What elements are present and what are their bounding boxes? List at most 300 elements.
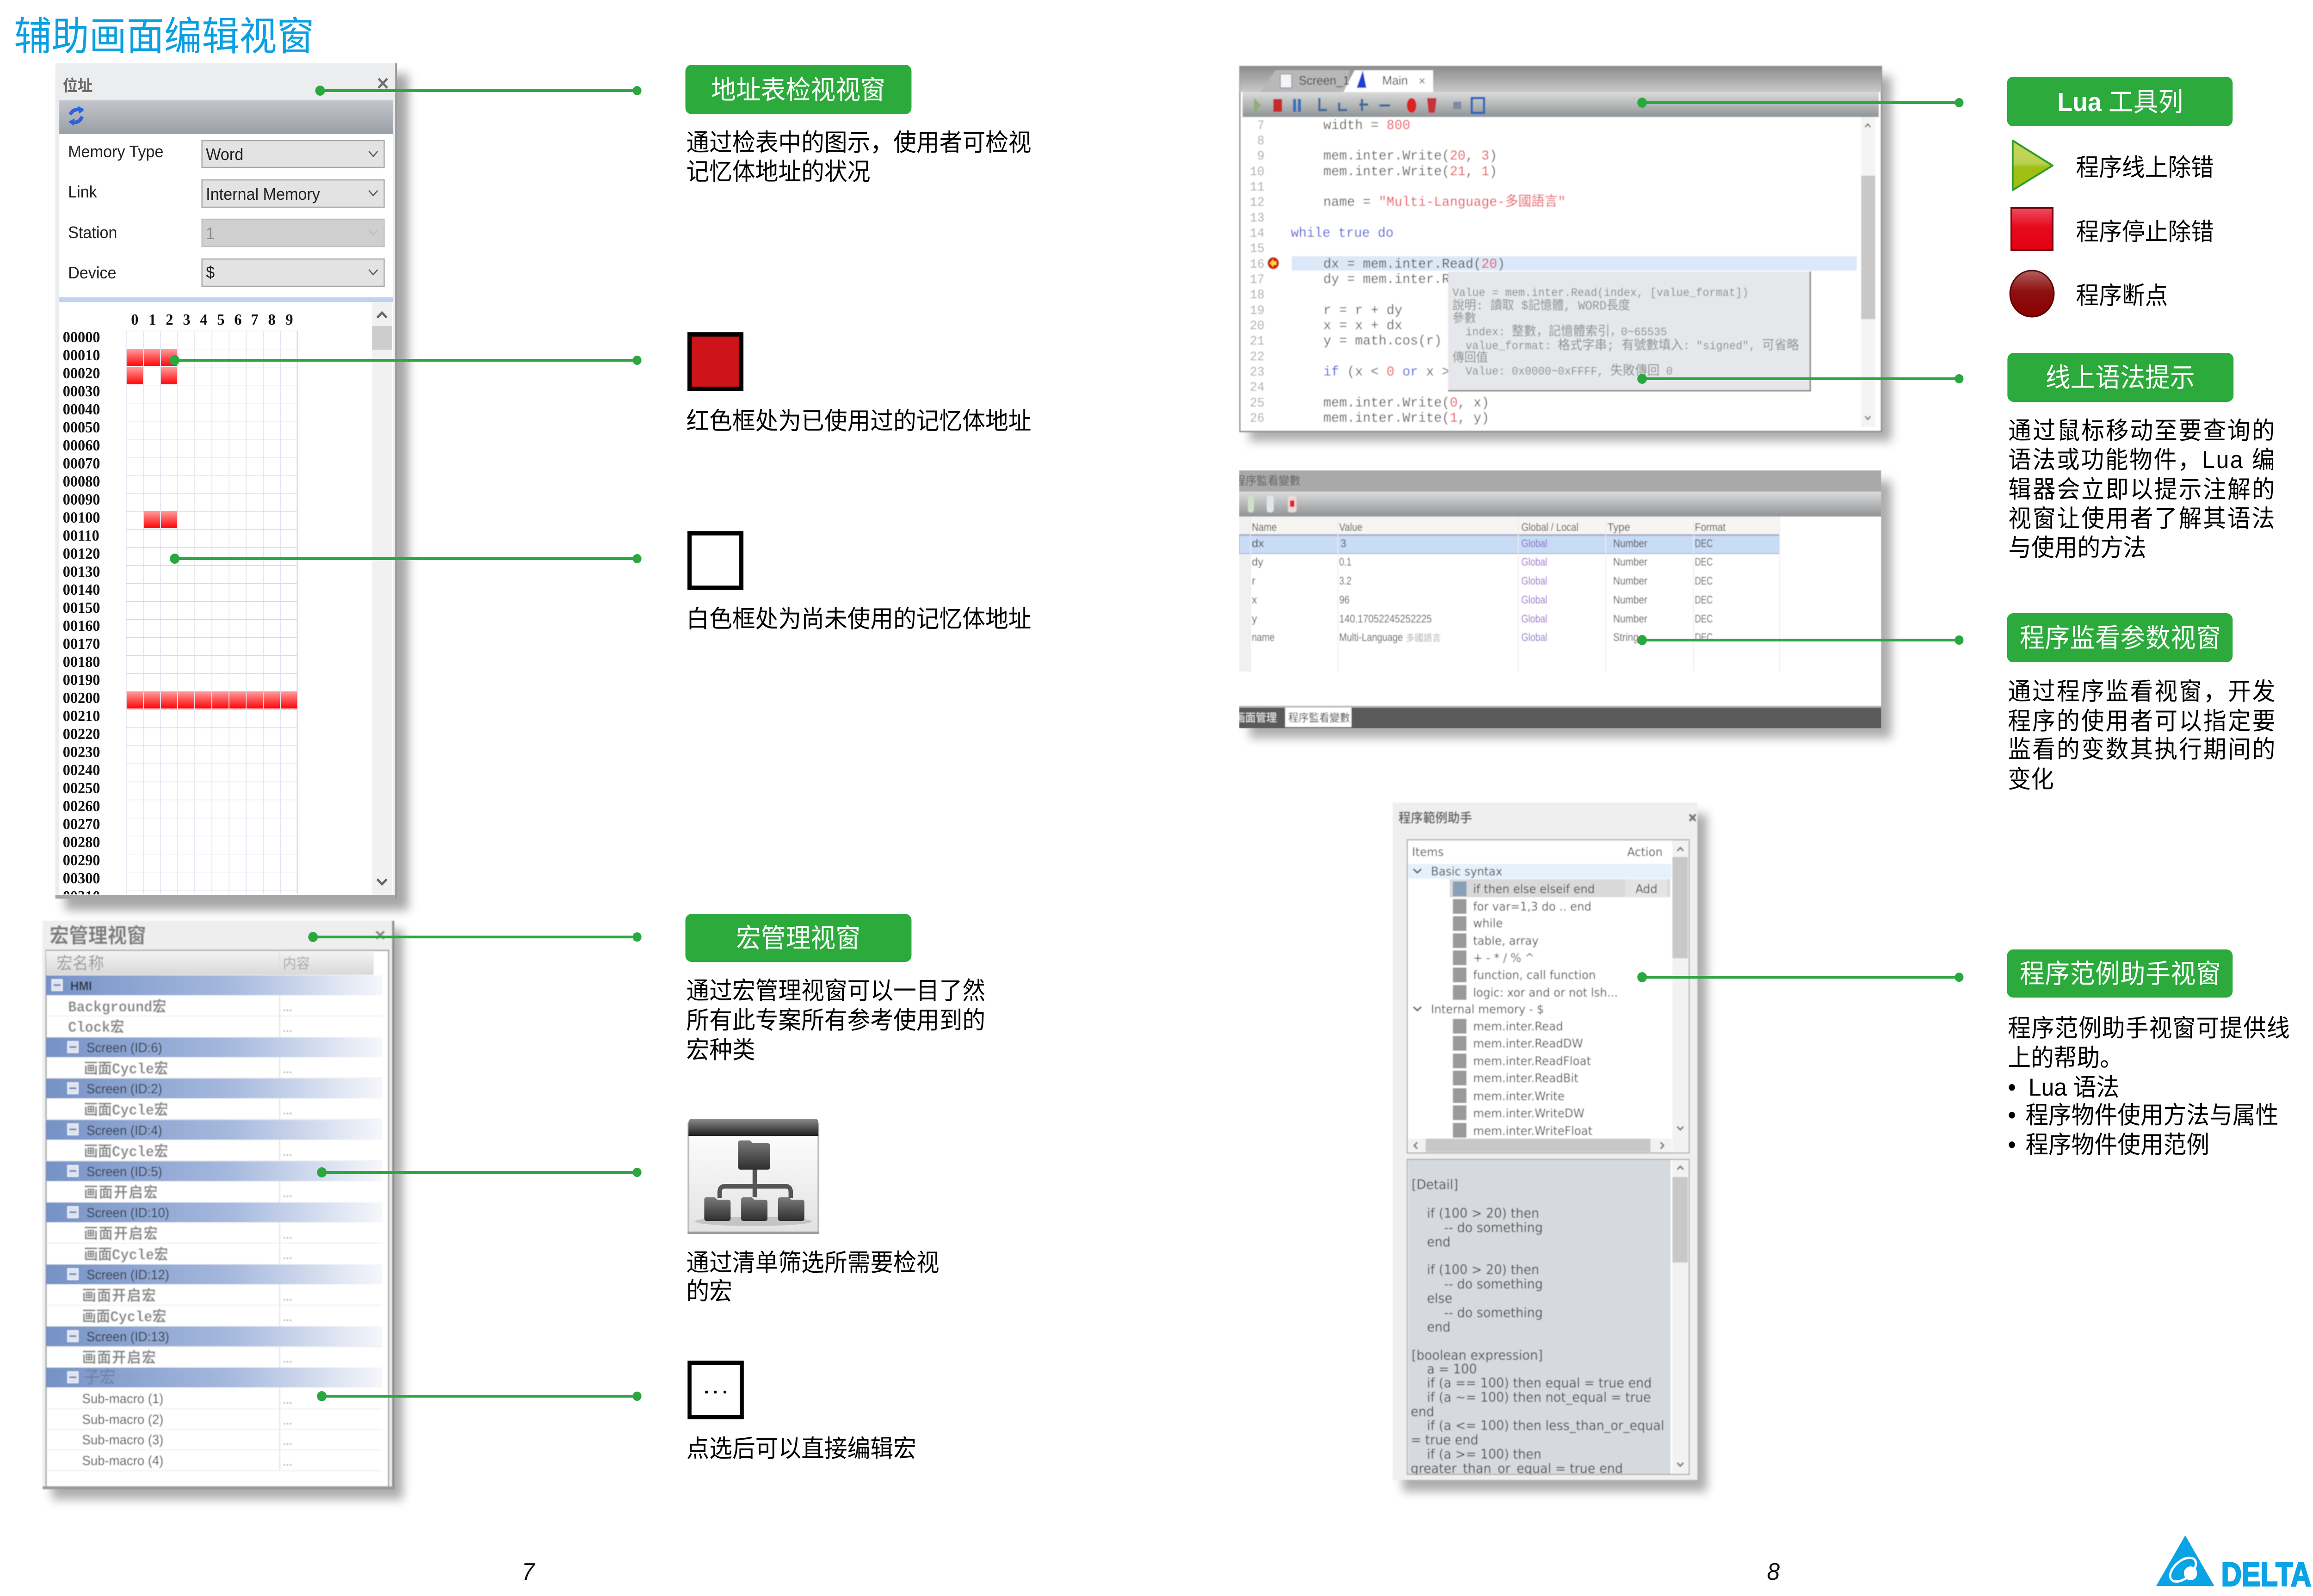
row addresses: 00090	[63, 491, 100, 508]
row addresses: 00030	[63, 382, 100, 400]
row addresses: 00050	[63, 419, 100, 436]
detail code text: end	[1427, 1319, 1451, 1335]
sub-macro labels: Sub-macro (2)	[82, 1411, 163, 1427]
row addresses: 00240	[63, 761, 100, 779]
column digits: 9	[285, 311, 293, 328]
edit dots: ...	[283, 1310, 292, 1324]
row addresses	[63, 328, 100, 905]
code text: mem.inter.Write(21, 1)	[1323, 164, 1497, 179]
field labels: Station	[68, 223, 117, 242]
dropdown: link	[202, 180, 384, 207]
macro labels: 画面Cycle宏	[82, 1308, 167, 1326]
column digits: 7	[251, 311, 259, 328]
icon: white box	[690, 533, 742, 588]
scrollbar	[1861, 117, 1875, 427]
dropdown: device	[202, 259, 384, 286]
header row: Format	[1695, 521, 1726, 533]
row addresses: 00000	[63, 328, 100, 346]
macro labels: 画面开启宏	[82, 1288, 157, 1305]
group labels: Screen (ID:4)	[87, 1122, 162, 1138]
heading: Lua toolbar: Lua 工具列	[2057, 87, 2183, 117]
table header: 宏名称	[56, 954, 104, 973]
group labels: Screen (ID:6)	[87, 1040, 162, 1055]
list scrollbars	[1408, 841, 1688, 1152]
column digits: 4	[200, 311, 207, 328]
callout line: syntax tip	[1637, 374, 1963, 384]
selected row	[1239, 536, 1780, 554]
row addresses: 00040	[63, 401, 100, 418]
heading: Lua toolbar	[2007, 77, 2233, 126]
panel: macro manager window	[43, 921, 403, 1499]
item text: mem.inter.ReadFloat	[1473, 1054, 1591, 1068]
text: example helper description: •	[2008, 1074, 2016, 1101]
breakpoint marker	[1268, 257, 1279, 269]
header row	[1239, 517, 1780, 536]
detail code text: if (a ~= 100) then not_equal = true	[1427, 1389, 1651, 1405]
callout line: address window	[315, 86, 642, 96]
row addresses: 00180	[63, 653, 100, 671]
title bar	[1235, 470, 1881, 492]
row addresses: 00310	[63, 887, 100, 905]
macro labels: 画面Cycle宏	[84, 1060, 168, 1078]
line numbers	[1250, 118, 1264, 426]
text: macro manager description: 宏种类	[686, 1036, 755, 1063]
table data: DEC	[1695, 574, 1713, 587]
row addresses: 00160	[63, 617, 100, 635]
row addresses: 00290	[63, 851, 100, 869]
page number 8: 8	[1767, 1558, 1780, 1585]
text: syntax tip description: 通过鼠标移动至要查询的	[2008, 417, 2275, 444]
page number 7: 7	[522, 1558, 535, 1585]
group labels: 子宏	[84, 1368, 116, 1386]
row addresses: 00220	[63, 725, 100, 743]
text: watch description: 通过程序监看视窗，开发	[2008, 678, 2275, 705]
close button	[378, 79, 387, 88]
group labels: Screen (ID:10)	[87, 1205, 169, 1220]
detail code text: a = 100	[1427, 1361, 1477, 1377]
tab bar: Main	[1382, 73, 1408, 87]
line numbers: 13	[1250, 211, 1264, 226]
line numbers: 25	[1250, 396, 1264, 411]
bottom tabs	[1235, 706, 1881, 728]
table data: Global	[1521, 612, 1547, 625]
panel: program example helper window	[1393, 802, 1707, 1491]
edit dots: ...	[283, 1414, 292, 1427]
detail code text: -- do something	[1444, 1305, 1543, 1320]
row addresses: 00260	[63, 797, 100, 815]
item text: Internal memory - $	[1431, 1002, 1544, 1016]
callout line: macro filter	[317, 1167, 642, 1177]
macro labels: 画面Cycle宏	[84, 1143, 168, 1161]
sub-macro labels: Sub-macro (3)	[82, 1432, 163, 1447]
table data: DEC	[1695, 593, 1713, 606]
toolbar	[1239, 492, 1881, 517]
edit dots: ...	[283, 1352, 292, 1365]
code text	[1291, 117, 1565, 426]
field labels: Device	[68, 264, 117, 282]
table data: Global	[1521, 555, 1547, 568]
row separators	[46, 1016, 382, 1471]
item list	[1407, 840, 1689, 1153]
text: syntax tip description: 与使用的方法	[2008, 534, 2146, 561]
icon: folder tree	[687, 1119, 819, 1234]
syntax tooltip: index: 整數，記憶體索引，0~65535	[1466, 324, 1667, 339]
header row: Global / Local	[1521, 521, 1578, 533]
heading: macro manager window	[686, 914, 911, 962]
table data: DEC	[1695, 555, 1713, 568]
sub-macro labels: Sub-macro (1)	[82, 1391, 163, 1406]
group labels	[70, 979, 169, 1386]
bottom tabs: 程序監看變數	[1288, 711, 1350, 724]
column digits: 1	[148, 311, 156, 328]
item text: mem.inter.ReadDW	[1473, 1036, 1583, 1050]
memory grid	[63, 311, 298, 905]
icon: breakpoint circle	[2010, 271, 2054, 317]
text: filter description	[686, 1249, 939, 1305]
row addresses: 00210	[63, 707, 100, 725]
macro labels: 画面开启宏	[84, 1226, 159, 1243]
table data: Global	[1521, 593, 1547, 606]
syntax tooltip: Value: 0x0000~0xFFFF, 失敗傳回 0	[1466, 363, 1673, 379]
item text: logic: xor and or not lsh...	[1473, 986, 1618, 999]
field labels	[68, 142, 163, 282]
toolbar	[59, 100, 393, 134]
icon: refresh	[68, 106, 84, 126]
syntax tooltip	[1448, 271, 1810, 391]
detail code text: end	[1411, 1404, 1434, 1419]
header row: Name	[1252, 521, 1277, 533]
text: syntax tip description: 语法或功能物件，Lua 编	[2008, 446, 2275, 473]
text: syntax tip description	[2008, 417, 2275, 561]
macro labels: 画面Cycle宏	[84, 1246, 168, 1264]
line numbers: 10	[1250, 165, 1264, 179]
item text: if then else elseif end	[1473, 882, 1595, 896]
dropdown: memory type: Word	[206, 145, 243, 164]
edit dots: ...	[283, 1021, 292, 1035]
line numbers: 9	[1257, 149, 1264, 164]
line numbers: 11	[1250, 180, 1264, 195]
dropdown: station: 1	[206, 224, 215, 243]
table header	[46, 951, 374, 1471]
text: example helper description: •	[2008, 1131, 2016, 1158]
scrollbar	[372, 302, 392, 895]
table data: r	[1252, 574, 1255, 587]
group labels: Screen (ID:12)	[87, 1267, 169, 1282]
macro labels: 画面Cycle宏	[84, 1102, 168, 1119]
text: macro manager description: 通过宏管理视窗可以一目了然	[686, 977, 985, 1004]
row addresses: 00070	[63, 455, 100, 472]
text: example helper description: •	[2008, 1102, 2016, 1128]
line numbers: 18	[1250, 288, 1264, 302]
column digits: 8	[268, 311, 276, 328]
detail code text: greater_than_or_equal = true end	[1411, 1460, 1623, 1476]
detail code text: if (100 > 20) then	[1427, 1205, 1539, 1221]
panel: address table window	[56, 63, 408, 910]
code text: mem.inter.Write(1, y)	[1323, 410, 1489, 426]
row addresses: 00270	[63, 815, 100, 833]
column digits: 5	[217, 311, 224, 328]
macro labels: 画面开启宏	[82, 1350, 157, 1367]
text: example helper description: Lua 语法	[2029, 1074, 2119, 1101]
sub-macro labels	[82, 1391, 163, 1468]
header row: Value	[1339, 521, 1362, 533]
detail code text: [boolean expression]	[1411, 1347, 1543, 1363]
text: breakpoint: 程序断点	[2076, 282, 2168, 309]
line numbers: 24	[1250, 380, 1264, 395]
code text: mem.inter.Write(0, x)	[1323, 395, 1489, 411]
table data: DEC	[1695, 537, 1713, 549]
window title: 位址	[63, 77, 93, 95]
row addresses: 00010	[63, 346, 100, 364]
heading: watch window: 程序监看参数视窗	[2020, 623, 2221, 653]
text: stop debug: 程序停止除错	[2076, 218, 2214, 245]
edit dots	[283, 1000, 292, 1468]
code text: while true do	[1291, 225, 1393, 241]
item text: Basic syntax	[1431, 864, 1503, 878]
callout line: macro edit	[317, 1391, 642, 1401]
text: edit macro description: 点选后可以直接编辑宏	[686, 1435, 916, 1462]
row addresses: 00230	[63, 743, 100, 761]
table data: 3.2	[1339, 574, 1351, 587]
detail code text: -- do something	[1444, 1276, 1543, 1292]
bottom tabs: 画面管理	[1235, 711, 1277, 724]
icon: red box	[690, 334, 742, 389]
item text: + - * / % ^	[1473, 951, 1534, 965]
tab bar: ×	[1419, 74, 1426, 88]
detail code text: if (100 > 20) then	[1427, 1262, 1539, 1277]
field labels: Link	[68, 183, 97, 201]
table data: Number	[1613, 537, 1647, 549]
group labels: Screen (ID:5)	[87, 1164, 162, 1179]
text: red box meaning: 红色框处为已使用过的记忆体地址	[686, 407, 1031, 434]
table data: 140.17052245252225	[1339, 612, 1432, 625]
used cells	[127, 349, 297, 709]
macro labels: Clock宏	[68, 1019, 124, 1036]
syntax tooltip: value_format: 格式字串; 有號數填入: "signed", 可省略	[1466, 338, 1799, 353]
table data: dy	[1252, 555, 1263, 568]
item text: while	[1473, 916, 1503, 930]
logo: Delta	[2156, 1535, 2311, 1593]
text: example helper description: 程序物件使用范例	[2025, 1131, 2209, 1158]
code text: width = 800	[1323, 117, 1410, 133]
item text: mem.inter.WriteDW	[1473, 1106, 1584, 1120]
callout line: used cells	[170, 355, 642, 365]
item list: Action	[1627, 845, 1663, 859]
row addresses: 00100	[63, 509, 100, 526]
detail code text: = true end	[1411, 1432, 1478, 1448]
detail code text: if (a <= 100) then less_than_or_equal	[1427, 1417, 1664, 1433]
line numbers: 14	[1250, 226, 1264, 241]
edit dots: ...	[283, 1455, 292, 1468]
expand boxes	[52, 980, 78, 1383]
callout line: watch window	[1637, 635, 1963, 645]
text: example helper description	[2008, 1015, 2290, 1158]
detail code text: [Detail]	[1411, 1177, 1458, 1192]
syntax tooltip: Value = mem.inter.Read(index, [value_format])	[1453, 287, 1749, 300]
line numbers: 17	[1250, 272, 1264, 287]
field labels: Memory Type	[68, 142, 163, 161]
edit dots: ...	[283, 1290, 292, 1303]
row addresses: 00250	[63, 779, 100, 797]
table data: Number	[1613, 612, 1647, 625]
column digits: 6	[234, 311, 241, 328]
detail box	[1407, 1159, 1689, 1476]
line numbers: 12	[1250, 195, 1264, 210]
text: watch description	[2008, 678, 2275, 793]
detail code text	[1411, 1177, 1664, 1476]
edit dots: ...	[283, 1103, 292, 1117]
panel: watch variables window	[1235, 470, 1892, 738]
tab bar	[1240, 67, 1881, 92]
item text: mem.inter.Read	[1473, 1019, 1563, 1033]
item text: for var=1,3 do .. end	[1473, 900, 1591, 913]
code text: name = "Multi-Language-多國語言"	[1323, 193, 1565, 210]
text: address table description: 通过检表中的图示，使用者可检视	[686, 129, 1031, 156]
row addresses: 00190	[63, 671, 100, 689]
text: watch description: 变化	[2008, 766, 2054, 793]
heading: address table window	[686, 65, 911, 114]
column digits	[131, 314, 292, 325]
edit dots: ...	[283, 1062, 292, 1076]
macro labels: 画面开启宏	[84, 1184, 159, 1202]
table data: y	[1252, 612, 1257, 625]
column digits: 3	[183, 311, 190, 328]
syntax tooltip: 傳回值	[1453, 351, 1488, 365]
text: example helper description: 程序范例助手视窗可提供线	[2008, 1015, 2290, 1041]
row addresses: 00060	[63, 437, 100, 454]
heading: example helper	[2007, 949, 2233, 998]
heading: watch window	[2007, 613, 2233, 662]
line numbers: 23	[1250, 365, 1264, 380]
item text: mem.inter.ReadBit	[1473, 1071, 1578, 1085]
text: example helper description: 程序物件使用方法与属性	[2025, 1102, 2278, 1128]
table data: Number	[1613, 574, 1647, 587]
item list: Add	[1635, 882, 1657, 896]
group labels: HMI	[70, 979, 92, 993]
text: filter description: 的宏	[686, 1278, 732, 1305]
code text: dy = mem.inter.R	[1323, 271, 1450, 287]
table data: x	[1252, 593, 1257, 606]
row addresses: 00080	[63, 473, 100, 490]
detail code text: -- do something	[1444, 1220, 1543, 1235]
line numbers: 16	[1250, 257, 1264, 272]
heading: online syntax tip: 线上语法提示	[2046, 363, 2195, 392]
text: macro manager description: 所有此专案所有参考使用到的	[686, 1007, 985, 1034]
row addresses: 00300	[63, 869, 100, 887]
item text: table, array	[1473, 934, 1539, 948]
code text: if (x < 0 or x >	[1323, 364, 1450, 380]
heading: address table window: 地址表检视视窗	[711, 75, 885, 105]
line numbers: 19	[1250, 303, 1264, 318]
text: address table description	[686, 129, 1031, 185]
text: filter description: 通过清单筛选所需要检视	[686, 1249, 939, 1276]
column digits: 0	[131, 311, 138, 328]
window title: 程序範例助手	[1398, 810, 1472, 825]
debug toolbar	[1243, 92, 1879, 117]
panel: Lua code editor	[1240, 67, 1892, 441]
dropdown: memory type	[202, 141, 384, 167]
edit dots: ...	[283, 1434, 292, 1448]
row addresses: 00130	[63, 563, 100, 580]
heading: example helper: 程序范例助手视窗	[2020, 959, 2221, 988]
table data: Number	[1613, 555, 1647, 568]
edit dots: ...	[283, 1186, 292, 1200]
window title: 宏管理视窗	[49, 924, 146, 947]
callout line: unused cells	[170, 554, 642, 564]
row addresses: 00140	[63, 581, 100, 598]
table data: 3	[1341, 537, 1346, 549]
detail code text: else	[1427, 1290, 1453, 1306]
group labels: Screen (ID:2)	[87, 1081, 162, 1096]
table data: DEC	[1695, 612, 1713, 625]
dropdown: link: Internal Memory	[206, 185, 320, 203]
table data	[1252, 537, 1713, 643]
line numbers: 7	[1257, 118, 1264, 133]
detail code text: if (a == 100) then equal = true end	[1427, 1375, 1652, 1391]
line numbers: 21	[1250, 334, 1264, 349]
row addresses: 00120	[63, 545, 100, 562]
sub-macro labels: Sub-macro (4)	[82, 1453, 163, 1468]
item text: mem.inter.Write	[1473, 1089, 1565, 1103]
item text: function, call function	[1473, 968, 1596, 982]
text: syntax tip description: 辑器会立即以提示注解的	[2008, 476, 2275, 503]
code text: r = r + dy	[1323, 302, 1402, 318]
detail code text: end	[1427, 1234, 1451, 1250]
callout line: example helper	[1637, 972, 1963, 982]
row addresses: 00020	[63, 364, 100, 382]
table data: Global	[1521, 631, 1547, 643]
line numbers: 8	[1257, 134, 1264, 148]
heading: macro manager window: 宏管理视窗	[736, 924, 860, 953]
item icons	[1453, 881, 1466, 1138]
group labels: Screen (ID:13)	[87, 1329, 169, 1344]
table data: 0.1	[1339, 555, 1351, 568]
table data: Number	[1613, 593, 1647, 606]
line numbers: 22	[1250, 350, 1264, 364]
current line highlight	[1292, 256, 1857, 271]
icon: play triangle	[2013, 141, 2053, 190]
header row: Type	[1608, 521, 1630, 533]
code text: mem.inter.Write(20, 3)	[1323, 148, 1497, 164]
text: watch description: 程序的使用者可以指定要	[2008, 708, 2275, 734]
syntax tooltip: 說明: 讀取 $記憶體, WORD長度	[1453, 298, 1630, 313]
title bar: 程序監看變數	[1235, 474, 1300, 487]
row addresses: 00200	[63, 689, 100, 707]
macro labels: Background宏	[68, 998, 167, 1016]
code text: dx = mem.inter.Read(20)	[1323, 256, 1505, 272]
dropdown: station	[202, 219, 384, 246]
heading: online syntax tip	[2007, 353, 2233, 402]
table data: Multi-Language	[1339, 631, 1403, 643]
table data: 多國語言	[1406, 633, 1441, 643]
text: white box meaning: 白色框处为尚未使用的记忆体地址	[686, 605, 1031, 632]
edit dots: ...	[283, 1248, 292, 1262]
code text: y = math.cos(r)	[1323, 333, 1442, 349]
text: watch description: 监看的变数其执行期间的	[2008, 736, 2275, 763]
group rows	[46, 975, 382, 1387]
line numbers: 20	[1250, 319, 1264, 333]
tab bar: Screen_1	[1299, 73, 1349, 87]
macro labels	[68, 998, 168, 1367]
item text	[1431, 864, 1618, 1138]
callout line: macro window	[308, 932, 642, 942]
column digits: 2	[166, 311, 173, 328]
item list: Items	[1412, 845, 1444, 859]
edit dots: ...	[283, 1000, 292, 1014]
table header: 内容	[283, 955, 310, 972]
text: syntax tip description: 视窗让使用者了解其语法	[2008, 505, 2275, 532]
callout line: Lua toolbar	[1637, 98, 1963, 108]
